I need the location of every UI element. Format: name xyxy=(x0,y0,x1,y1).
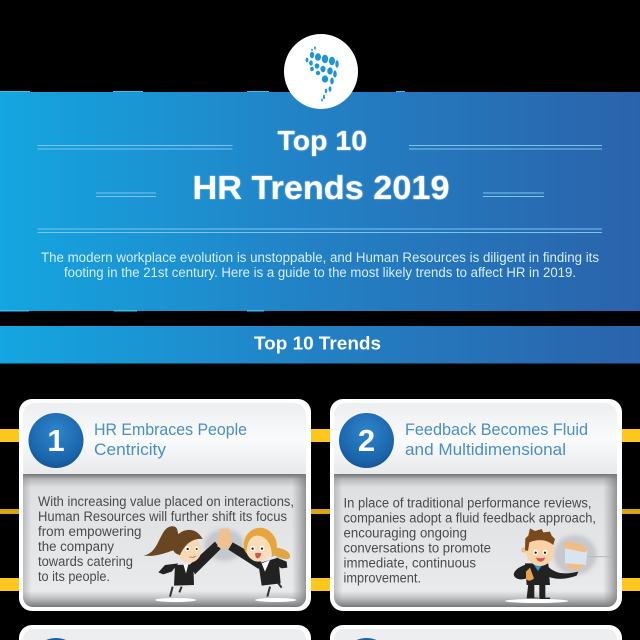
card 2 body text: In place of traditional performance reviews, xyxy=(344,496,592,510)
number badge 2 xyxy=(339,413,394,468)
card 1 body text: from empowering xyxy=(38,524,142,539)
logo badge xyxy=(284,34,358,109)
intro paragraph xyxy=(41,250,599,280)
card 1 heading: Centricity xyxy=(94,440,166,459)
title: Top 10: Top 10 xyxy=(278,125,367,156)
title: HR Trends 2019: HR Trends 2019 xyxy=(192,169,450,206)
card 1 body text: to its people. xyxy=(38,569,110,584)
card 2 body text: encouraging ongoing xyxy=(344,526,467,540)
card 2 heading: Feedback Becomes Fluid xyxy=(405,420,588,439)
card 2 heading xyxy=(405,420,588,459)
panel: trend card 4 (cropped top) xyxy=(330,625,622,640)
connector bars: yellow xyxy=(0,429,640,591)
panel: trend card 2 xyxy=(330,399,622,611)
card 1 heading: HR Embraces People xyxy=(94,420,247,439)
card 2 body text: conversations to promote xyxy=(344,540,491,556)
header banner xyxy=(0,91,640,312)
card 2 body text xyxy=(344,496,596,586)
number badge 2: 2 xyxy=(358,423,375,458)
number badge 1 xyxy=(28,413,84,468)
title: Top 10: Top 10 xyxy=(278,125,367,156)
card 1 body text: Human Resources will further shift its focus xyxy=(38,509,287,524)
illustration: man with tin-can phone xyxy=(505,528,610,603)
panel: trend card 1 xyxy=(19,399,311,611)
intro paragraph: footing in the 21st century. Here is a guide to the most likely trends to affect HR in 2019. xyxy=(64,265,576,280)
card 1 body text: the company xyxy=(38,539,114,554)
card 1 body text: With increasing value placed on interactions, xyxy=(38,494,294,509)
card 1 heading xyxy=(94,420,247,459)
section banner: Top 10 Trends xyxy=(0,326,640,364)
intro paragraph: The modern workplace evolution is unstoppable, and Human Resources is diligent in finding its xyxy=(41,250,599,265)
card 2 heading: and Multidimensional xyxy=(405,440,566,459)
section banner: Top 10 Trends: Top 10 Trends xyxy=(254,332,381,354)
card 2 body text: improvement. xyxy=(344,570,421,586)
card 2 body text: immediate, continuous xyxy=(344,556,476,570)
illustration: two women high-five xyxy=(143,526,296,602)
panel: trend card 3 (cropped top) xyxy=(19,625,311,640)
card 1 body text: towards catering xyxy=(38,554,133,569)
title: HR Trends 2019: HR Trends 2019 xyxy=(192,169,450,206)
card 1 body text xyxy=(38,494,294,584)
card 2 body text: companies adopt a fluid feedback approach, xyxy=(344,510,596,526)
number badge 1: 1 xyxy=(47,423,65,458)
